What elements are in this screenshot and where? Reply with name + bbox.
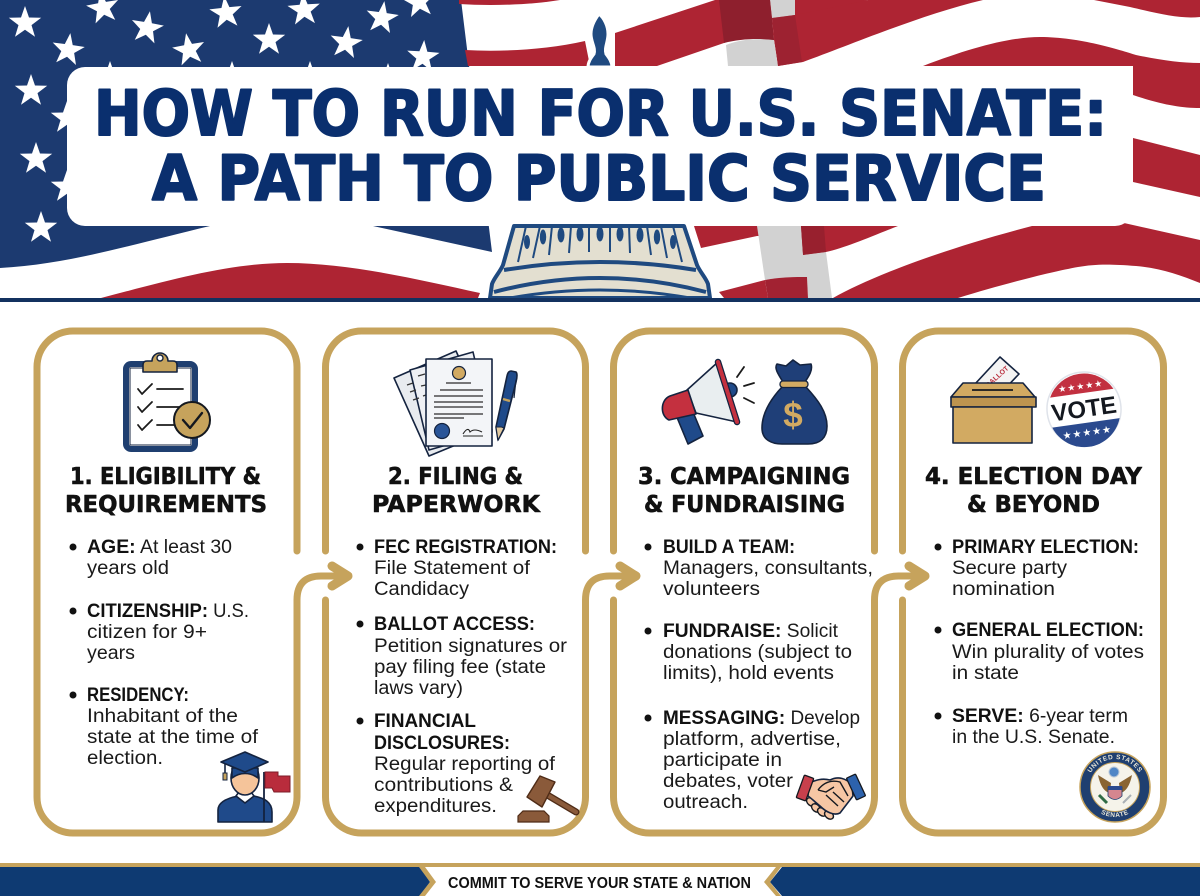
bullet list: in state [952,663,1019,684]
panel: step 3 campaigning [614,331,925,833]
bullet list: FINANCIAL [374,711,476,732]
bullet list [356,537,568,817]
flag canton with stars [0,0,492,268]
bullet list: AGE: At least 30 [87,537,232,558]
bullet list: BUILD A TEAM: [663,537,795,558]
bullet list: debates, voter [663,771,794,792]
icon: senate seal [1079,751,1151,823]
bullet list [644,537,873,813]
header flag banner [0,0,1200,302]
icon: clipboard checklist [126,353,210,449]
icon: vote button: VOTE [1050,392,1118,427]
bullet list: volunteers [663,579,760,600]
bullet list: contributions & [374,775,513,796]
heading: & FUNDRAISING [644,492,845,518]
icon: gavel [518,776,576,822]
bullet list: pay filing fee (state [374,657,546,678]
icon: megaphone [662,362,754,444]
title: A PATH TO PUBLIC SERVICE [152,142,1046,215]
bullet list: nomination [952,579,1055,600]
bullet list [70,537,259,769]
bullet list: FUNDRAISE: Solicit [663,621,839,642]
icon: vote button [1042,367,1126,452]
panel: step 4 election day [899,328,1167,836]
bullet list: File Statement of [374,558,531,579]
heading: & BEYOND [967,492,1100,518]
bullet list: expenditures. [374,796,497,817]
bullet list: MESSAGING: Develop [663,708,860,729]
icon: senate seal: UNITED STATES [1087,754,1142,772]
icon: ballot box [951,357,1036,443]
bullet list [934,537,1144,748]
bullet list: years old [87,558,169,579]
bullet list: CITIZENSHIP: U.S. [87,601,249,622]
bullet list: FEC REGISTRATION: [374,537,557,558]
card 2 border with arrow to step 3 [326,331,636,833]
bullet list: SERVE: 6-year term [952,706,1128,727]
capitol dome [486,226,714,300]
bullet list: Regular reporting of [374,754,556,775]
bullet list: Petition signatures or [374,636,568,657]
card 4 border [902,331,1164,833]
bullet list: PRIMARY ELECTION: [952,537,1139,558]
icon: vote button: ★★★★★ [1058,378,1104,394]
red flag stripes [101,0,1200,298]
title: HOW TO RUN FOR U.S. SENATE: [94,77,1107,150]
bullet list: state at the time of [87,727,259,748]
bullet list: Candidacy [374,579,470,600]
icon: senate seal: SENATE [1101,810,1128,818]
capitol spire [588,14,612,67]
heading: REQUIREMENTS [65,492,267,518]
bullet list: donations (subject to [663,642,852,663]
heading: PAPERWORK [372,492,541,518]
bullet list: laws vary) [374,678,463,699]
heading: 4. ELECTION DAY [925,464,1142,490]
icon: handshake [796,774,866,821]
bullet list: RESIDENCY: [87,685,189,706]
title panel [67,67,1133,226]
bullet list: limits), hold events [663,663,834,684]
icon: ballot box: BALLOT [985,365,1011,389]
bullet list: GENERAL ELECTION: [952,620,1144,641]
bullet list: election. [87,748,163,769]
flagpole shadow [719,0,832,298]
heading [65,464,267,518]
footer text: COMMIT TO SERVE YOUR STATE & NATION [448,875,751,892]
bullet list: platform, advertise, [663,729,841,750]
bullet list: in the U.S. Senate. [952,727,1115,748]
card 1 border with arrow to step 2 [37,331,348,833]
panel: step 1 eligibility [37,331,348,833]
bullet list: DISCLOSURES: [374,733,510,754]
icon: money bag: $ [783,396,803,435]
bullet list: years [87,643,135,664]
heading: 2. FILING & [388,464,523,490]
bullet list: Inhabitant of the [87,706,238,727]
bullet list: Managers, consultants, [663,558,873,579]
heading [372,464,541,518]
heading: 3. CAMPAIGNING [638,464,850,490]
title [94,77,1107,215]
heading [925,464,1142,518]
heading [638,464,850,518]
bullet list: outreach. [663,792,748,813]
icon: vote button: ★★★★★ [1062,424,1113,442]
heading: 1. ELIGIBILITY & [70,464,261,490]
icon: documents and pen [394,351,517,456]
card 3 border with arrow to step 4 [614,331,925,833]
icon: graduate with flag [218,752,290,822]
banner rule [0,298,1200,302]
bullet list: Win plurality of votes [952,642,1144,663]
footer ribbon [0,863,1200,896]
panel: step 2 filing [326,331,636,833]
bullet list: citizen for 9+ [87,622,207,643]
bullet list: BALLOT ACCESS: [374,614,535,635]
icon: money bag [762,360,827,444]
bullet list: participate in [663,750,782,771]
bullet list: Secure party [952,558,1068,579]
